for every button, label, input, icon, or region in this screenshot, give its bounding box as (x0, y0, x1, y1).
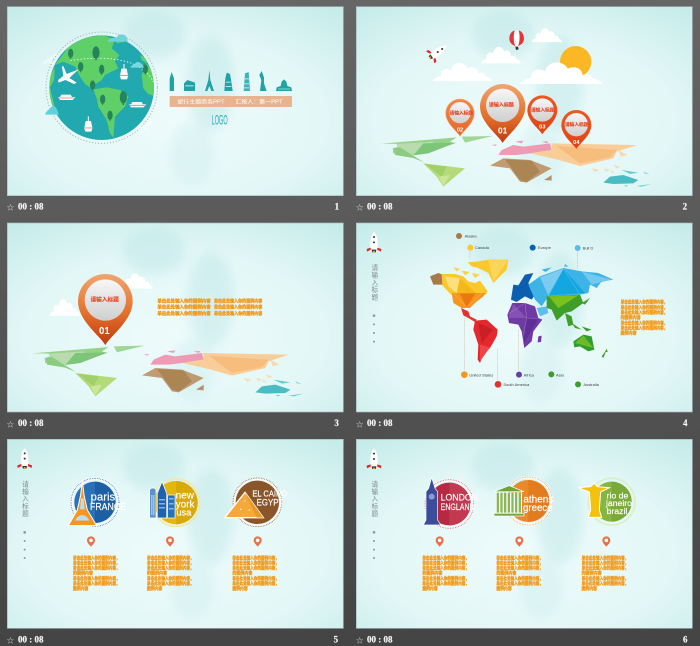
slide 5 panel (7, 439, 343, 628)
text block: Athens (496, 555, 543, 592)
text block: Athens: 单击此处输入你的图例内容， (496, 580, 543, 587)
text block: Paris: 单击此处输入你的图例内容， (73, 580, 120, 587)
badge: Paris: FRANCE (90, 502, 126, 513)
map legend labels: Europe (538, 245, 552, 250)
footer 1: 1 (335, 202, 340, 212)
body text: 单击此处输入你的图例内容 (214, 297, 262, 304)
text block: Athens: 图例内容 (496, 585, 512, 592)
pin 03: 03 (539, 125, 545, 131)
text block: New York: 单击此处输入你的图例内容， (147, 560, 194, 567)
text block: Cairo: 单击此处输入你的图例内容， (232, 575, 279, 582)
flat colour world map (380, 136, 652, 187)
footer 5: 00 : 08 (18, 635, 44, 645)
icon: rocket (367, 448, 381, 469)
slide 1: title slide: LOGO (212, 111, 228, 127)
badge: Rio: rio de (607, 490, 629, 500)
footer 2: 00 : 08 (367, 202, 393, 212)
map legend labels: Canada (475, 245, 490, 250)
badge: London (423, 478, 478, 528)
vertical title: 请输入标题 (370, 480, 378, 518)
text block: Paris: 单击此处输入你的图例内容， (73, 560, 120, 567)
subtitle bar (170, 96, 292, 107)
footer 5 (6, 635, 339, 646)
text block: Paris: 单击此处输入你的图例内容， (73, 575, 120, 582)
text block: London: 单击此处输入你的图例内容， (422, 565, 469, 572)
body text: 的图例内容 (621, 314, 641, 321)
text block: Rio: 单击此处输入你的图例内容， (582, 565, 628, 572)
icon: sun (560, 46, 591, 77)
map legend labels: Bull D (583, 245, 593, 250)
text block: Athens: 的图例内容 (496, 570, 516, 577)
badge: Paris: paris (91, 492, 116, 504)
pin 04 (561, 110, 591, 149)
footer 6: 6 (683, 635, 688, 645)
body text: 单击此处输入你的图例内容 (157, 297, 211, 304)
clouds (49, 273, 154, 316)
text block: Cairo: 单击此处输入你的图例内容， (232, 560, 279, 567)
body text (157, 297, 262, 317)
text block: Cairo: 的图例内容 (232, 570, 252, 577)
text block: Rio: 单击此处输入你的图例内容， (582, 580, 628, 587)
footer 3: 3 (334, 418, 339, 428)
text block: Rio: 的图例内容 (582, 570, 602, 577)
slide 4: low poly world map (356, 223, 692, 430)
slide 2: pins and map (356, 7, 692, 214)
badge: New York: new (176, 490, 195, 501)
icon: map pins (87, 536, 262, 547)
body text: 单击此处输入你的图例内容 (157, 310, 211, 317)
text block: London: 单击此处输入你的图例内容， (422, 580, 469, 587)
footer 3: 00 : 08 (18, 418, 44, 428)
badge: London: ENGLAND (441, 502, 475, 512)
text block: Paris: 单击此处输入你的图例内容， (73, 565, 120, 572)
map legend labels (456, 233, 600, 388)
badge: Paris (68, 478, 126, 526)
footer 5: 5 (334, 635, 339, 645)
large pin 01: 01 (99, 326, 110, 337)
body text: 图例内容 (621, 330, 637, 337)
subtitle bar: 旅行主题商务PPT (177, 97, 225, 105)
body text: 单击此处输入你的图例内容， (621, 319, 667, 326)
body text: 单击此处输入你的图例内容， (621, 299, 667, 306)
navigation dots (373, 314, 375, 343)
badge: Athens: greece (523, 503, 553, 514)
text block: Cairo: 单击此处输入你的图例内容， (232, 580, 279, 587)
text block: Paris: 单击此处输入你的图例内容， (73, 555, 120, 562)
badge: Cairo (225, 478, 287, 527)
footer 1: 00 : 08 (18, 202, 44, 212)
text block: Rio: 图例内容 (582, 585, 597, 592)
text block: Rio: 单击此处输入你的图例内容， (582, 560, 628, 567)
text block: Rio (582, 555, 628, 592)
icon: map pins (436, 536, 610, 547)
navigation dots (23, 531, 26, 559)
clouds (433, 28, 603, 84)
body text: 单击此处输入你的图例内容 (214, 303, 262, 310)
footer 6: 00 : 08 (367, 635, 393, 645)
text block: London: 单击此处输入你的图例内容， (422, 575, 469, 582)
badge: New York: york (176, 499, 195, 510)
text block: Cairo: 单击此处输入你的图例内容， (232, 555, 279, 562)
slide 1 panel (7, 7, 343, 196)
icon: rocket (367, 232, 381, 253)
text block: London: 的图例内容 (422, 570, 442, 577)
pin 03: 请输入标题 (531, 107, 555, 114)
icon: hot air balloon (509, 31, 524, 50)
pin 02: 请输入标题 (450, 109, 473, 116)
landmark silhouettes (170, 70, 292, 91)
leader lines (464, 251, 578, 380)
vertical title: 请输入标题 (370, 263, 378, 302)
text block: Cairo: 图例内容 (232, 585, 248, 592)
badge: London: LONDON (441, 493, 478, 503)
footer 4: 00 : 08 (367, 418, 393, 428)
text block: Paris: 图例内容 (73, 585, 88, 592)
icon: rocket (17, 448, 32, 469)
footer 3 (6, 418, 339, 430)
text block: Paris (73, 555, 120, 592)
icon: rocket (425, 40, 451, 64)
text block: New York: 单击此处输入你的图例内容， (147, 555, 194, 562)
slide 6 panel (356, 439, 692, 628)
map legend labels: Alaska (465, 233, 477, 238)
text block: New York: 图例内容 (147, 585, 162, 592)
flat colour world map (32, 346, 304, 396)
text block: London: 单击此处输入你的图例内容， (422, 560, 469, 567)
large pin 01: 请输入标题 (91, 296, 119, 304)
text block: Athens: 单击此处输入你的图例内容， (496, 575, 543, 582)
low poly world map (430, 260, 613, 363)
footer 3: ☆ (6, 420, 14, 430)
text block: London (422, 555, 469, 592)
pin 03 (527, 95, 557, 134)
pin 01: 01 (498, 126, 508, 136)
body text: 单击此处输入你的图例内容， (621, 304, 667, 311)
footer 4: ☆ (356, 420, 364, 430)
map legend labels: United States (469, 372, 493, 377)
body text: 单击此处输入你的图例内容 (157, 303, 211, 310)
text block: Paris: 的图例内容 (73, 570, 93, 577)
body text: 单击此处输入你的图例内容， (621, 309, 667, 316)
badge: Athens (494, 477, 553, 525)
text block: London: 单击此处输入你的图例内容， (422, 555, 469, 562)
map legend labels: South America (503, 382, 530, 387)
footer 1 (6, 202, 340, 214)
large pin 01 (78, 274, 133, 345)
footer 4 (356, 418, 688, 430)
badge: Cairo: EL CAIRO (252, 490, 287, 499)
navigation dots (373, 531, 375, 559)
slide 1: title slide (6, 7, 343, 214)
text block: Cairo: 单击此处输入你的图例内容， (232, 565, 279, 572)
pin 01 (480, 84, 525, 143)
body text (621, 299, 667, 337)
subtitle bar: 汇报人：第一PPT (235, 97, 283, 105)
text block: Athens: 单击此处输入你的图例内容， (496, 555, 543, 562)
body text: 单击此处输入你的图例内容， (621, 324, 667, 331)
text block: London: 图例内容 (422, 585, 438, 592)
footer 2: ☆ (356, 204, 364, 214)
text block: Rio: 单击此处输入你的图例内容， (582, 575, 628, 582)
slide 4 panel (356, 223, 692, 412)
footer 6 (356, 635, 688, 646)
body text: 单击此处输入你的图例内容 (214, 310, 262, 317)
slide 3 panel (7, 223, 343, 412)
pin 02: 02 (457, 127, 463, 133)
footer 2: 2 (683, 202, 688, 212)
map legend labels: Australia (583, 382, 600, 387)
slide 2 panel (356, 7, 692, 196)
pin 04: 请输入标题 (565, 121, 589, 128)
badge: Cairo: EGYPT (257, 497, 284, 507)
globe illustration (43, 32, 157, 143)
slide 6: city badges (356, 439, 692, 646)
text block: New York: 单击此处输入你的图例内容， (147, 575, 194, 582)
pin 02 (446, 99, 474, 136)
footer 1: ☆ (6, 204, 14, 214)
map legend labels: Africa (524, 372, 535, 377)
slide 3: single pin and text (6, 223, 343, 430)
pin 04: 04 (573, 140, 580, 146)
slide 5: city badges (6, 439, 343, 646)
footer 4: 4 (683, 418, 688, 428)
text block: New York (147, 555, 194, 592)
text block: New York: 单击此处输入你的图例内容， (147, 565, 194, 572)
badge: Rio: janeiro (605, 498, 632, 508)
badge: Athens: athens (523, 495, 553, 506)
text block: Cairo (232, 555, 279, 592)
text block: Athens: 单击此处输入你的图例内容， (496, 565, 543, 572)
badge: Rio: brazil (607, 506, 627, 516)
map legend labels: Asia (556, 372, 565, 377)
badge: Rio (578, 478, 635, 525)
badge: New York (150, 479, 200, 526)
text block: New York: 单击此处输入你的图例内容， (147, 580, 194, 587)
vertical title: 请输入标题 (20, 480, 29, 518)
text block: New York: 的图例内容 (147, 570, 167, 577)
badge: New York: usa (176, 508, 192, 518)
pin 01: 请输入标题 (489, 101, 514, 108)
text block: Athens: 单击此处输入你的图例内容， (496, 560, 543, 567)
text block: Rio: 单击此处输入你的图例内容， (582, 555, 628, 562)
footer 2 (356, 202, 688, 214)
